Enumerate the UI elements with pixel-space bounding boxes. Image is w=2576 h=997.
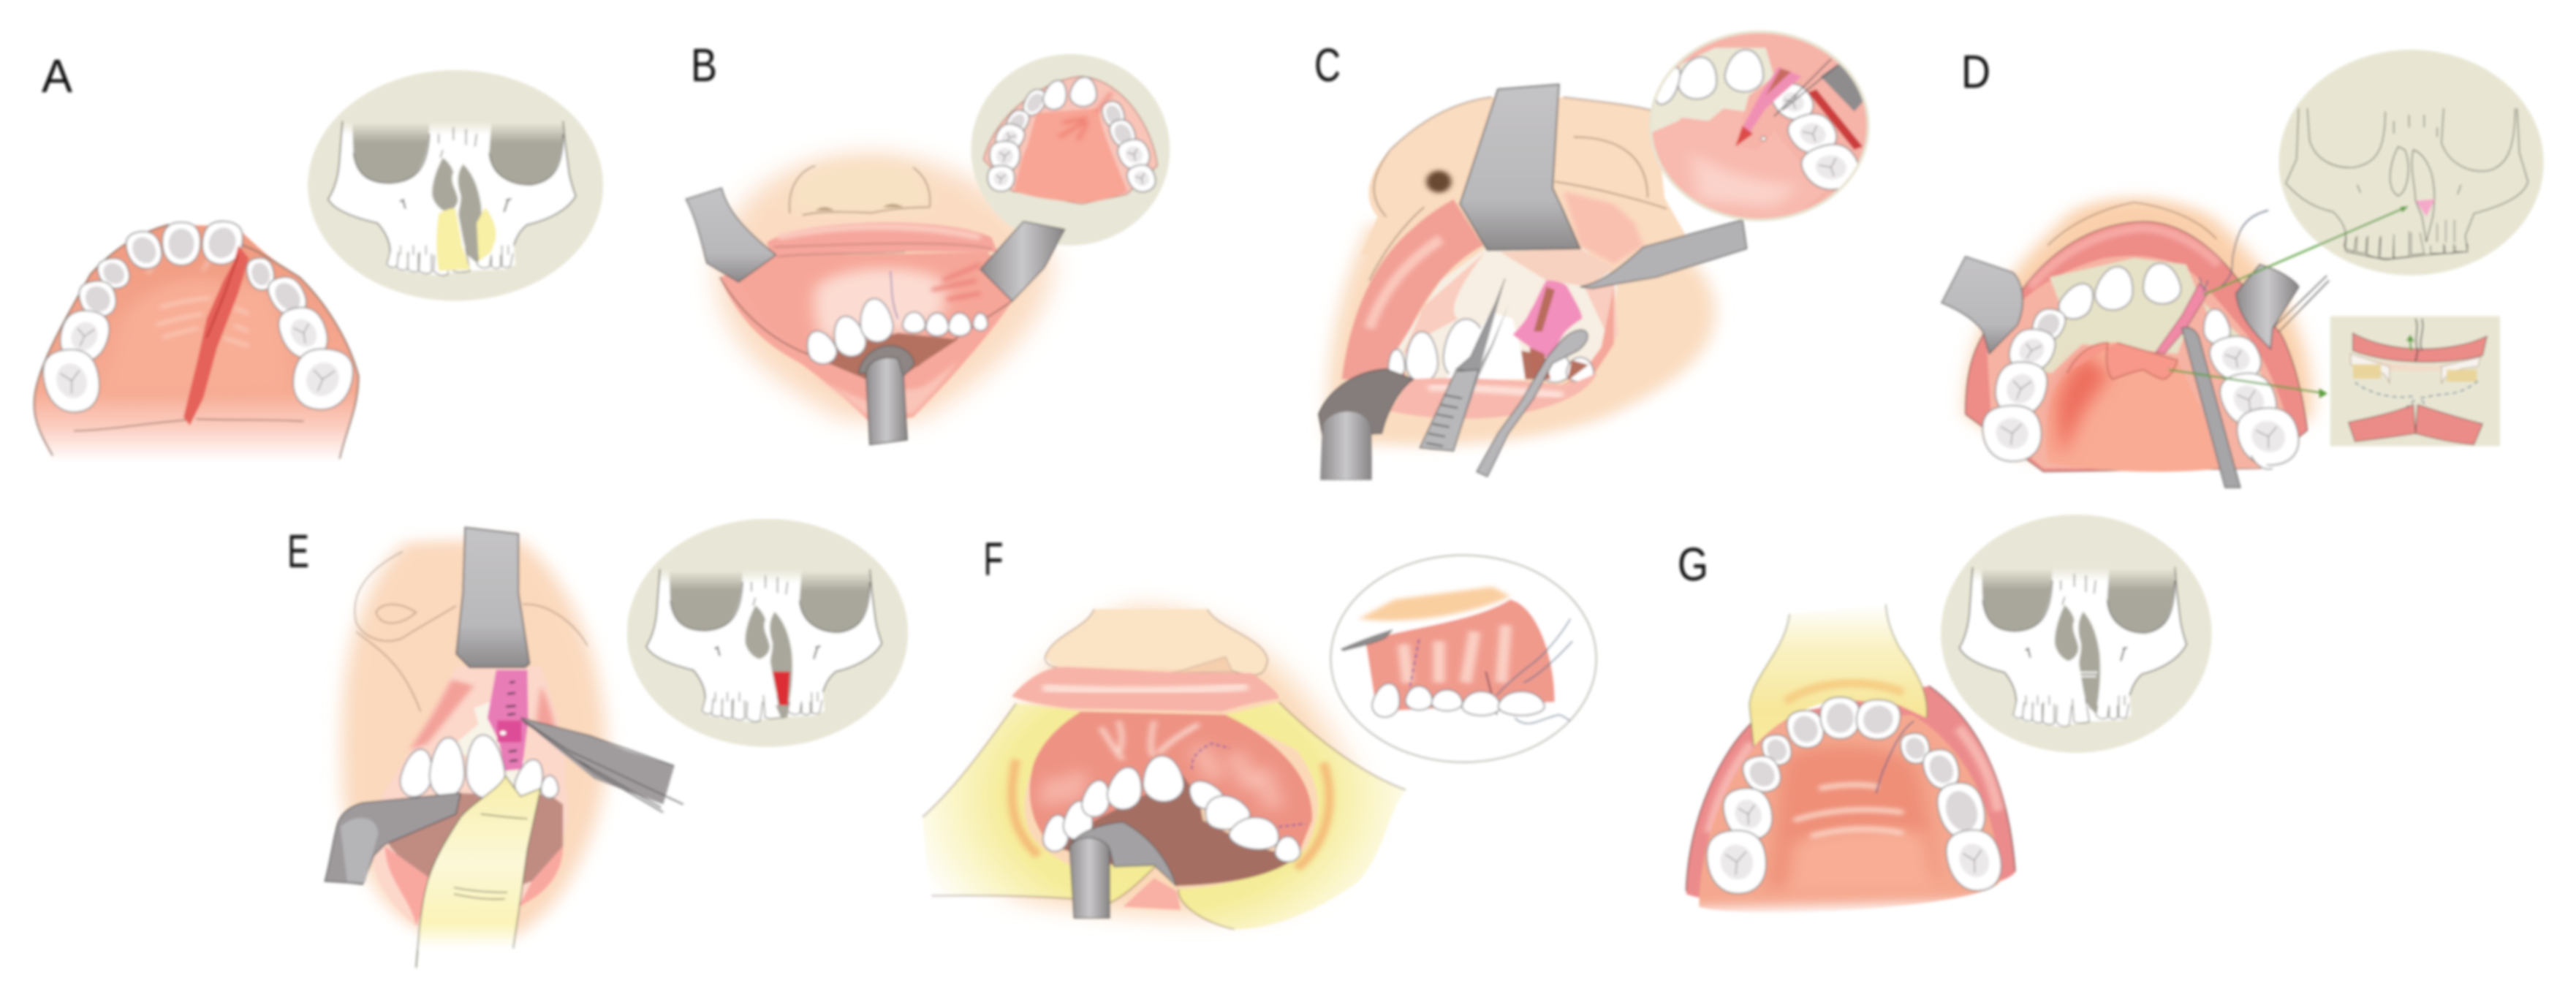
label E: E	[287, 525, 309, 577]
skull inset D	[2278, 50, 2544, 276]
inset circle B	[971, 54, 1170, 246]
suction tube C	[1319, 369, 1414, 479]
lip	[1012, 667, 1278, 711]
yellow retractor pad	[1749, 604, 1927, 747]
skull inset A	[308, 70, 603, 301]
thin instrument	[2182, 327, 2240, 488]
skull inset G	[1941, 515, 2211, 753]
mouth illustration C	[1319, 32, 1871, 479]
label D: D	[1961, 45, 1990, 98]
label A: A	[42, 50, 72, 102]
mouth illustration E	[325, 528, 683, 968]
panel D: suturing, with skull inset and cross-section	[1942, 45, 2544, 488]
palate arch A	[34, 220, 358, 462]
nose	[1045, 609, 1268, 675]
right retractor	[1580, 220, 1747, 289]
cleft	[183, 246, 249, 425]
panel F: palatal and buccal closure	[923, 533, 1596, 929]
bottom retractor	[325, 793, 461, 884]
label G: G	[1678, 538, 1708, 591]
panel C: flap elevation, side view	[1314, 32, 1871, 479]
panel E: finger support and mucosal suture	[287, 519, 908, 968]
forceps	[520, 718, 683, 812]
label B: B	[691, 39, 717, 91]
label F: F	[984, 533, 1003, 585]
mouth illustration D	[1942, 50, 2544, 488]
scalpel	[1420, 279, 1509, 451]
top retractor	[456, 528, 530, 667]
green arrow to cross-section	[2169, 370, 2327, 398]
skull inset E	[627, 519, 908, 747]
retractor right	[2236, 265, 2299, 349]
retractor left	[686, 188, 776, 282]
cotton probe	[1477, 330, 1588, 477]
suture thread	[2199, 211, 2268, 292]
oral cavity	[1052, 773, 1297, 886]
suction tube F	[1069, 822, 1176, 918]
panel A: cleft palate with skull inset	[34, 50, 603, 462]
label C: C	[1314, 39, 1341, 91]
yellow drapes	[923, 704, 1156, 903]
retractor right	[980, 221, 1065, 301]
green arrow to skull	[2203, 207, 2408, 295]
palate mucosa	[1030, 711, 1312, 859]
mouth illustration B	[686, 54, 1170, 444]
mouth illustration F	[923, 556, 1596, 929]
panel B: upper lip retracted with palate inset	[686, 39, 1170, 444]
suction tube B	[858, 346, 914, 444]
top retractor	[1460, 85, 1580, 250]
retractor left	[1942, 257, 2023, 354]
inset circle F	[1331, 556, 1596, 762]
pink flap	[488, 670, 529, 770]
cross-section inset D	[2330, 316, 2500, 446]
pink flap	[1512, 281, 1582, 379]
palate arch G	[1659, 604, 2039, 952]
inset circle C	[1648, 32, 1871, 220]
panel G: final result	[1659, 515, 2211, 952]
finger	[416, 776, 541, 968]
